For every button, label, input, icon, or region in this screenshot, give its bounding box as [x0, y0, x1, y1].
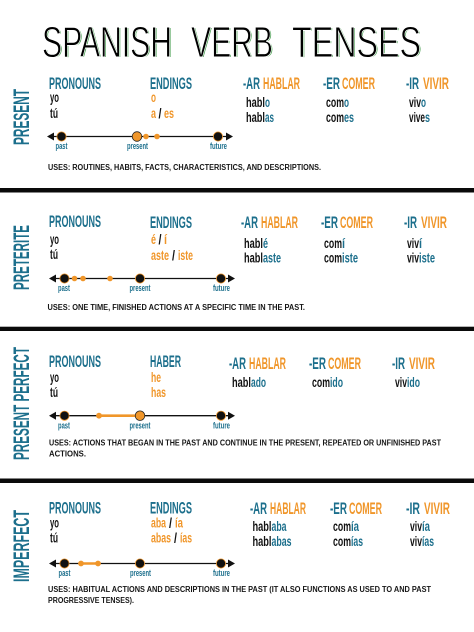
title: VERB: [191, 18, 273, 67]
er verb column: COMER: [349, 500, 382, 518]
ir verb column: ido: [407, 374, 420, 390]
er verb column: iste: [342, 250, 358, 266]
ir verb column: ía: [422, 518, 430, 534]
timeline: present: [130, 283, 151, 293]
ar verb column: [243, 75, 300, 125]
uses text: [48, 585, 431, 605]
ir verb column: VIVIR: [409, 355, 435, 373]
ir verb column: -IR: [392, 355, 405, 373]
panel: preterite: [9, 213, 447, 312]
pronouns column: [49, 500, 101, 546]
title: SPANISH: [42, 18, 172, 67]
ar verb column: ado: [251, 374, 266, 390]
endings column: /: [158, 232, 162, 247]
endings column: [150, 214, 193, 263]
ir verb column: viv: [410, 533, 422, 549]
er verb column: -ER: [309, 355, 326, 373]
ir verb column: VIVIR: [424, 500, 450, 518]
endings column: /: [169, 516, 172, 530]
pronouns column: [49, 353, 101, 400]
er verb column: es: [344, 109, 354, 125]
ar verb column: habl: [246, 94, 265, 110]
ar verb column: HABLAR: [263, 75, 300, 93]
ir verb column: vive: [409, 109, 425, 125]
timeline: past: [58, 283, 70, 293]
heading: preterite: PRETERITE: [9, 225, 34, 290]
ar verb column: habl: [252, 533, 272, 549]
endings column: abas: [151, 530, 171, 546]
uses text: USES: ONE TIME, FINISHED ACTIONS AT A SPECIFIC TIME IN THE PAST.: [48, 303, 305, 312]
uses text: USES: HABITUAL ACTIONS AND DESCRIPTIONS IN THE PAST (IT ALSO FUNCTIONS AS USED TO AND PAST: [48, 585, 431, 594]
ir verb column: -IR: [406, 500, 420, 518]
er verb column: ía: [351, 518, 359, 534]
er verb column: com: [312, 374, 330, 390]
ir verb column: VIVIR: [421, 214, 447, 232]
er verb column: com: [333, 533, 351, 549]
ar verb column: aste: [263, 250, 281, 266]
panel: present: [9, 75, 449, 172]
ar verb column: -AR: [243, 75, 260, 93]
pronouns column: yo: [50, 369, 59, 385]
ir verb column: viv: [395, 374, 407, 390]
er verb column: -ER: [330, 500, 347, 518]
endings column: í: [164, 231, 168, 247]
endings column: /: [158, 106, 162, 121]
haber column: HABER: [150, 353, 181, 371]
timeline: future: [213, 420, 230, 430]
er verb column: com: [326, 94, 344, 110]
ar verb column: abas: [272, 533, 292, 549]
endings column: es: [164, 105, 174, 121]
pronouns column: tú: [50, 105, 58, 121]
pronouns column: tú: [50, 384, 58, 400]
er verb column: -ER: [321, 214, 338, 232]
ar verb column: as: [265, 109, 274, 125]
heading: imperfect: IMPERFECT: [9, 510, 34, 582]
pronouns column: PRONOUNS: [49, 500, 101, 518]
title: TENSES: [293, 19, 422, 68]
pronouns column: tú: [50, 530, 58, 546]
ir verb column: viv: [407, 235, 419, 251]
uses text: USES: ROUTINES, HABITS, FACTS, CHARACTERISTICS, AND DESCRIPTIONS.: [48, 163, 321, 172]
endings column: a: [151, 105, 156, 121]
er verb column: com: [333, 518, 351, 534]
ir verb column: [406, 75, 449, 125]
panel: present perfect: [9, 347, 441, 460]
pronouns column: PRONOUNS: [49, 353, 101, 371]
title: SPANISH: [43, 19, 173, 68]
ar verb column: aba: [272, 518, 287, 534]
endings column: é: [151, 231, 156, 247]
ir verb column: iste: [419, 250, 435, 266]
endings column: aste: [151, 247, 169, 263]
uses text: ACTIONS.: [49, 450, 86, 458]
timeline: [49, 274, 235, 293]
er verb column: COMER: [342, 75, 375, 93]
er verb column: [309, 355, 361, 390]
ar verb column: [229, 355, 286, 390]
timeline: present: [130, 420, 151, 430]
er verb column: ías: [351, 533, 363, 549]
timeline: future: [210, 141, 227, 151]
timeline: past: [56, 141, 68, 151]
timeline: future: [213, 568, 230, 578]
pronouns column: PRONOUNS: [49, 213, 101, 231]
timeline: past: [58, 568, 71, 578]
heading: present: PRESENT: [9, 89, 34, 145]
er verb column: [323, 75, 375, 125]
ar verb column: -AR: [229, 355, 246, 373]
uses text: PROGRESSIVE TENSES).: [48, 596, 134, 605]
er verb column: o: [344, 94, 349, 110]
er verb column: COMER: [340, 214, 373, 232]
endings column: o: [151, 89, 156, 105]
er verb column: [330, 500, 382, 549]
haber column: has: [151, 384, 166, 400]
ar verb column: [250, 500, 306, 549]
endings column: [150, 75, 192, 121]
ar verb column: é: [263, 235, 268, 251]
timeline: [49, 559, 235, 578]
pronouns column: yo: [50, 89, 59, 105]
endings column: ía: [175, 514, 183, 530]
er verb column: com: [324, 235, 342, 251]
er verb column: [321, 214, 373, 266]
ar verb column: -AR: [250, 500, 267, 518]
uses text: USES: ACTIONS THAT BEGAN IN THE PAST AND CONTINUE IN THE PRESENT, REPEATED OR UNFINISHED PAST: [49, 439, 441, 448]
ir verb column: [406, 500, 450, 549]
timeline: present: [127, 141, 148, 151]
ir verb column: -IR: [406, 75, 419, 93]
uses text: [49, 439, 441, 458]
pronouns column: yo: [50, 231, 59, 247]
ir verb column: viv: [407, 250, 419, 266]
title: [42, 18, 422, 68]
ir verb column: o: [421, 94, 426, 110]
ir verb column: -IR: [404, 214, 417, 232]
ar verb column: HABLAR: [249, 355, 286, 373]
timeline: [47, 132, 233, 151]
ir verb column: viv: [410, 518, 422, 534]
ir verb column: [404, 214, 447, 266]
endings column: ENDINGS: [150, 214, 192, 232]
er verb column: com: [326, 109, 344, 125]
ir verb column: s: [425, 109, 430, 125]
endings column: aba: [151, 514, 166, 530]
ir verb column: ías: [422, 533, 434, 549]
endings column: [150, 500, 192, 546]
ar verb column: HABLAR: [270, 500, 306, 518]
endings column: /: [174, 530, 177, 546]
ar verb column: habl: [232, 374, 251, 390]
ar verb column: o: [265, 94, 270, 110]
ar verb column: habl: [246, 109, 265, 125]
haber column: [150, 353, 181, 400]
title: TENSES: [292, 18, 421, 67]
timeline: past: [58, 420, 70, 430]
ir verb column: [392, 355, 435, 390]
endings column: iste: [178, 247, 193, 263]
er verb column: ido: [330, 374, 343, 390]
ar verb column: [241, 214, 298, 266]
ar verb column: habl: [244, 235, 263, 251]
er verb column: com: [324, 250, 342, 266]
endings column: /: [172, 248, 175, 263]
er verb column: -ER: [323, 75, 340, 93]
pronouns column: tú: [50, 246, 58, 262]
ar verb column: HABLAR: [261, 214, 298, 232]
er verb column: í: [342, 235, 346, 251]
timeline: [49, 411, 235, 430]
endings column: ías: [180, 530, 192, 546]
haber column: he: [151, 369, 161, 385]
pronouns column: [49, 213, 101, 262]
ar verb column: habl: [244, 250, 263, 266]
ir verb column: viv: [409, 94, 421, 110]
pronouns column: PRONOUNS: [49, 75, 101, 93]
ar verb column: habl: [252, 518, 272, 534]
endings column: ENDINGS: [150, 75, 192, 93]
timeline: future: [213, 283, 230, 293]
endings column: ENDINGS: [150, 500, 192, 518]
timeline: present: [130, 568, 151, 578]
pronouns column: [49, 75, 101, 121]
title: VERB: [192, 19, 274, 68]
er verb column: COMER: [328, 355, 361, 373]
pronouns column: yo: [50, 514, 59, 530]
ir verb column: í: [419, 235, 423, 251]
heading: present perfect: PRESENT PERFECT: [9, 347, 34, 460]
ar verb column: -AR: [241, 214, 258, 232]
panel: imperfect: [9, 500, 450, 605]
ir verb column: VIVIR: [423, 75, 449, 93]
